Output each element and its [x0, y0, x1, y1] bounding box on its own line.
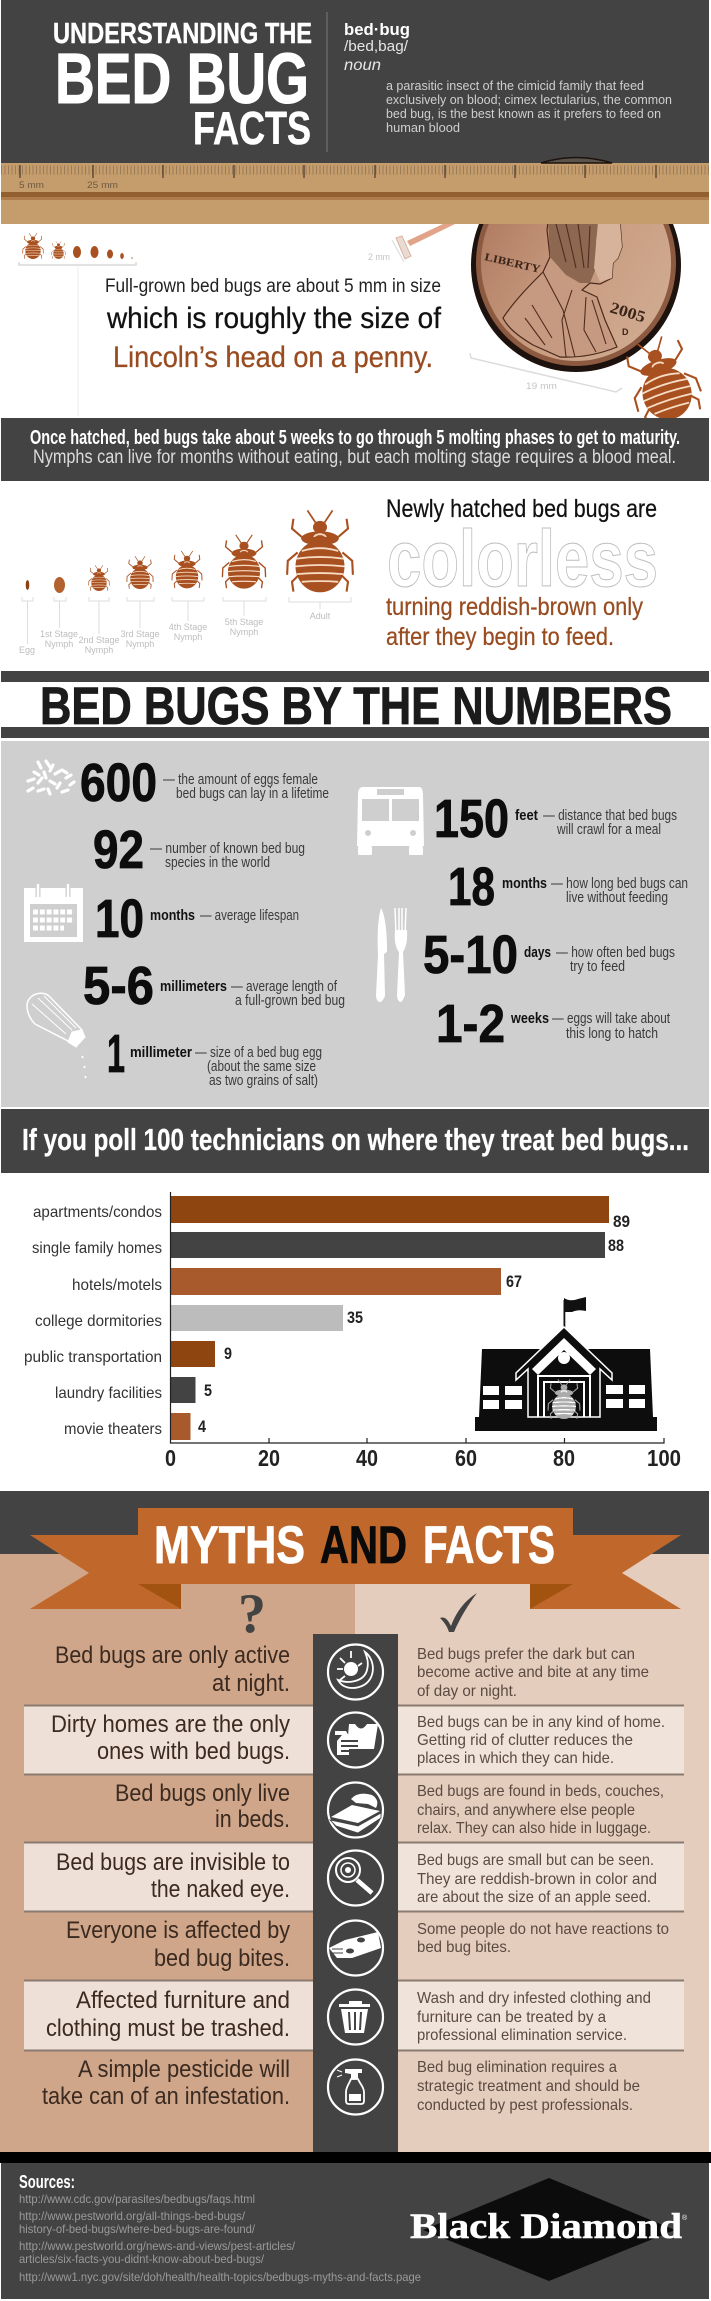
- fact 6: [417, 1990, 651, 2044]
- chart axes: [165, 1192, 681, 1471]
- bar: college dormitories 35: 35: [347, 1308, 363, 1327]
- definition: human blood: [386, 120, 460, 135]
- myth 5: Everyone is affected by: [66, 1917, 290, 1944]
- myth 4: [56, 1849, 290, 1903]
- stat: 1: millimeter: [130, 1044, 192, 1061]
- center column: [313, 1634, 398, 2152]
- myth 3: [115, 1780, 290, 1833]
- fact 5: Some people do not have reactions to: [417, 1921, 669, 1938]
- stat: 5-10: — how often bed bugs: [556, 944, 675, 961]
- icon: fifth stage nymph: 5th Stage: [225, 617, 263, 627]
- fact 3: Bed bugs are found in beds, couches,: [417, 1783, 664, 1800]
- icon: second stage nymph: 2nd Stage: [78, 635, 120, 645]
- icon: fourth stage nymph: Nymph: [174, 632, 202, 642]
- logo: Black Diamond: ®: [682, 2214, 688, 2222]
- LIBERTY: LIBERTY: [483, 251, 542, 276]
- icon: trash can: [328, 1990, 383, 2044]
- definition: bed·bug: [344, 20, 410, 39]
- banner: MYTHS: [154, 1516, 305, 1575]
- title: UNDERSTANDING THE: [53, 18, 312, 50]
- stat: 1: (about the same size: [207, 1058, 316, 1075]
- definition: a parasitic insect of the cimicid family that feed: [386, 78, 644, 93]
- sources: http://www.cdc.gov/parasites/bedbugs/faqs.html: [19, 2192, 255, 2206]
- panel: ruler: 25 mm: [87, 180, 118, 190]
- fact 1: Bed bugs prefer the dark but can: [417, 1646, 635, 1663]
- sources: Sources:: [19, 2172, 75, 2192]
- row bands: [24, 1706, 684, 2051]
- chart axes: 80: [553, 1445, 575, 1471]
- icon: fifth stage nymph: Nymph: [230, 627, 258, 637]
- stat: 150: feet: [515, 807, 538, 824]
- definition: exclusively on blood; cimex lectularius, the common: [386, 92, 672, 107]
- banner: FACTS: [423, 1516, 555, 1575]
- penny arc above ruler: [541, 158, 612, 163]
- icon: fourth stage nymph: [169, 551, 207, 642]
- icon: large bed bug: [618, 330, 706, 428]
- title: [53, 18, 312, 154]
- bar: hotels/motels 67: 67: [506, 1272, 522, 1291]
- fact 6: professional elimination service.: [417, 2027, 627, 2044]
- text block: penny comparison: Full-grown bed bugs are about 5 mm in size: [105, 276, 441, 297]
- chart axes: 40: [356, 1445, 378, 1471]
- icon: egg: [19, 580, 35, 655]
- text block: colorless: [386, 495, 658, 651]
- logo: Black Diamond: [410, 2178, 688, 2281]
- myth 6: [46, 1987, 290, 2042]
- stat: 92: [93, 820, 305, 880]
- icon: knife and fork: [376, 908, 407, 1002]
- sources: history-of-bed-bugs/where-bed-bugs-are-found/: [19, 2222, 256, 2236]
- stat: 150: — distance that bed bugs: [543, 807, 677, 824]
- penny measure: 19 mm: [526, 381, 557, 391]
- fact 3: [417, 1783, 664, 1837]
- bar: laundry facilities 5: [55, 1377, 212, 1403]
- myth 3: Bed bugs only live: [115, 1780, 290, 1807]
- icon: salt shaker: [27, 993, 86, 1078]
- bar: hotels/motels 67: hotels/motels: [72, 1277, 162, 1294]
- fact 7: Bed bug elimination requires a: [417, 2059, 617, 2076]
- stat: 1-2: — eggs will take about: [552, 1010, 671, 1027]
- fact 7: [417, 2059, 640, 2114]
- logo: Black Diamond: Black Diamond: [410, 2206, 682, 2246]
- myth 4: the naked eye.: [151, 1876, 290, 1903]
- bar: hotels/motels 67: [72, 1268, 522, 1295]
- stat: 600: 600: [80, 753, 157, 813]
- stat: 1: as two grains of salt): [209, 1072, 318, 1089]
- definition: [344, 20, 672, 135]
- icon: pin: 2 mm: [368, 252, 390, 262]
- panel: molting band: [1, 418, 709, 481]
- icon: eggs: [28, 761, 74, 794]
- bar: single family homes 88: single family homes: [32, 1240, 162, 1257]
- stat: 600: [80, 753, 329, 813]
- icon: bus: [357, 787, 424, 855]
- fact 6: Wash and dry infested clothing and: [417, 1990, 651, 2007]
- stat: 5-10: days: [524, 944, 551, 961]
- stat: 10: 10: [95, 889, 144, 949]
- icon: second stage nymph: Nymph: [85, 645, 113, 655]
- bar: movie theaters 4: movie theaters: [64, 1421, 162, 1438]
- myth 7: [42, 2056, 290, 2110]
- icon: day and night: [328, 1644, 383, 1700]
- myth 1: at night.: [212, 1670, 290, 1697]
- icon: pin: [368, 224, 455, 262]
- fact 2: [417, 1714, 665, 1767]
- icon: third stage nymph: 3rd Stage: [120, 629, 160, 639]
- sources: articles/six-facts-you-didnt-know-about-bed-bugs/: [19, 2252, 265, 2266]
- title: BED BUG: [55, 40, 309, 119]
- penny measure: [470, 353, 622, 392]
- bar: apartments/condos 89: 89: [613, 1212, 630, 1231]
- definition: /bed,bag/: [344, 38, 409, 55]
- stat: 5-6: 5-6: [83, 956, 154, 1016]
- definition: bed bug, is the best known as it prefers to feed on: [386, 106, 661, 121]
- fact 5: [417, 1921, 669, 1956]
- text block: penny comparison: [105, 276, 442, 374]
- chart: life stages of the bed bug: [19, 510, 353, 655]
- fact 1: [417, 1646, 649, 1700]
- myth 2: [51, 1711, 290, 1765]
- text block: colorless: Newly hatched bed bugs are: [386, 495, 657, 523]
- icon: first stage nymph: Nymph: [45, 639, 73, 649]
- icon: fifth stage nymph: [222, 535, 266, 637]
- fact 4: [417, 1852, 657, 1906]
- bar: public transportation 9: public transportation: [24, 1349, 162, 1366]
- bar: laundry facilities 5: 5: [204, 1381, 212, 1400]
- bar: single family homes 88: [32, 1232, 624, 1258]
- bar chart: where technicians treat bed bugs: [24, 1192, 681, 1471]
- stat: 1-2: 1-2: [436, 994, 505, 1054]
- bar: college dormitories 35: [35, 1305, 363, 1331]
- stat: 92: species in the world: [165, 854, 270, 871]
- stat: 5-6: millimeters: [160, 978, 227, 995]
- stat: 18: [448, 857, 688, 917]
- myth 1: Bed bugs are only active: [55, 1642, 290, 1669]
- panel: numbers: [1, 741, 709, 1107]
- panel: myths and facts: [0, 1491, 709, 2152]
- fact 1: of day or night.: [417, 1683, 517, 1700]
- stat: 10: months: [150, 907, 195, 924]
- panel: header: [1, 0, 709, 163]
- icon: spray bottle: [328, 2060, 383, 2114]
- stat: 150: [434, 789, 677, 849]
- fact 2: Bed bugs can be in any kind of home.: [417, 1714, 665, 1731]
- icon: second stage nymph: [78, 565, 120, 655]
- stat: 5-6: [83, 956, 345, 1016]
- icon: bed: [328, 1782, 383, 1838]
- stat: 10: [95, 889, 299, 949]
- bar: apartments/condos 89: apartments/condos: [33, 1204, 162, 1221]
- bar: public transportation 9: [24, 1341, 232, 1367]
- icon: penny: [471, 158, 681, 372]
- icon: adult: Adult: [310, 611, 331, 621]
- fact 7: conducted by pest professionals.: [417, 2097, 633, 2114]
- myth 1: [55, 1642, 290, 1697]
- bar: public transportation 9: 9: [224, 1344, 232, 1363]
- definition: noun: [344, 57, 381, 74]
- stat: 5-10: 5-10: [423, 925, 518, 985]
- icon: penny: D: [622, 327, 629, 337]
- icon: first stage nymph: [40, 577, 78, 649]
- myth 3: in beds.: [215, 1806, 290, 1833]
- stat: 1-2: this long to hatch: [566, 1025, 658, 1042]
- text block: colorless: turning reddish-brown only: [386, 593, 643, 621]
- year: 2005: [608, 300, 647, 326]
- myth 7: take can of an infestation.: [42, 2083, 290, 2110]
- myth 2: Dirty homes are the only: [51, 1711, 290, 1738]
- myth 6: clothing must be trashed.: [46, 2015, 290, 2042]
- stat: 150: will crawl for a meal: [556, 821, 661, 838]
- chart axes: 60: [455, 1445, 477, 1471]
- stat: 92: 92: [93, 820, 144, 880]
- bar: laundry facilities 5: laundry facilities: [55, 1385, 162, 1402]
- bar: single family homes 88: 88: [608, 1236, 624, 1255]
- chart axes: 100: [647, 1445, 681, 1471]
- myth 4: Bed bugs are invisible to: [56, 1849, 290, 1876]
- panel: ruler: 5 mm: [19, 180, 44, 190]
- stat: 5-10: try to feed: [570, 958, 625, 975]
- banner: [30, 1508, 681, 1609]
- sources: http://www1.nyc.gov/site/doh/health/health-topics/bedbugs-myths-and-facts.page: [19, 2270, 421, 2284]
- bar: college dormitories 35: college dormitories: [35, 1313, 162, 1330]
- fact 1: become active and bite at any time: [417, 1664, 649, 1681]
- icon: third stage nymph: Nymph: [126, 639, 154, 649]
- fact 2: Getting rid of clutter reduces the: [417, 1732, 633, 1749]
- fact 2: places in which they can hide.: [417, 1750, 614, 1767]
- icon: calendar: [24, 884, 83, 942]
- stat: 18: 18: [448, 857, 495, 917]
- icon: question mark: ?: [238, 1583, 266, 1645]
- stat: 600: bed bugs can lay in a lifetime: [176, 785, 329, 802]
- fact 4: They are reddish-brown in color and: [417, 1871, 657, 1888]
- icon: egg: Egg: [19, 645, 35, 655]
- title: FACTS: [193, 102, 311, 154]
- stat: 10: — average lifespan: [200, 907, 299, 924]
- bar: movie theaters 4: [64, 1413, 206, 1440]
- icon: magnifying glass: [328, 1850, 383, 1906]
- stat: 1-2: [436, 994, 671, 1054]
- myth 6: Affected furniture and: [76, 1987, 290, 2014]
- icon: row of small bugs: [19, 233, 136, 416]
- chart axes: 20: [258, 1445, 280, 1471]
- bar: movie theaters 4: 4: [198, 1417, 206, 1436]
- icon: fourth stage nymph: 4th Stage: [169, 622, 207, 632]
- myth 5: bed bug bites.: [154, 1945, 290, 1972]
- icon: check mark: [440, 1593, 477, 1632]
- stat: 1-2: weeks: [510, 1010, 549, 1027]
- stat: 18: months: [502, 875, 547, 892]
- stat: 600: — the amount of eggs female: [163, 771, 318, 788]
- text block: penny comparison: Lincoln’s head on a penny.: [113, 341, 433, 374]
- stat: 1: — size of a bed bug egg: [195, 1044, 322, 1061]
- myth 5: [66, 1917, 290, 1972]
- fact 3: chairs, and anywhere else people: [417, 1802, 635, 1819]
- text block: penny comparison: which is roughly the size of: [106, 302, 442, 335]
- panel: ruler: [1, 163, 709, 224]
- stat: 5-10: [423, 925, 675, 985]
- fact 4: Bed bugs are small but can be seen.: [417, 1852, 654, 1869]
- stat: 5-6: a full-grown bed bug: [235, 992, 345, 1009]
- bar: apartments/condos 89: [33, 1196, 630, 1231]
- stat: 150: 150: [434, 789, 509, 849]
- myth 2: ones with bed bugs.: [97, 1738, 290, 1765]
- stat: 5-6: — average length of: [231, 978, 338, 995]
- heading: poll of technicians: [1, 1109, 709, 1173]
- banner: AND: [320, 1516, 407, 1575]
- chart axes: 0: [165, 1445, 176, 1471]
- stat: 18: live without feeding: [566, 889, 668, 906]
- icon: arm with bites: [328, 1920, 383, 1976]
- myth 7: A simple pesticide will: [78, 2056, 290, 2083]
- text block: colorless: after they begin to feed.: [386, 623, 614, 651]
- icon: third stage nymph: [120, 556, 160, 649]
- icon: school building with bed bug: [475, 1297, 657, 1431]
- fact 3: relax. They can also hide in luggage.: [417, 1820, 651, 1837]
- sources: http://www.pestworld.org/all-things-bed-bugs/: [19, 2209, 246, 2223]
- sources: [19, 2172, 421, 2284]
- fact 4: are about the size of an apple seed.: [417, 1889, 651, 1906]
- fact 6: furniture can be treated by a: [417, 2009, 606, 2026]
- sources: http://www.pestworld.org/news-and-views/pest-articles/: [19, 2239, 296, 2253]
- icon: adult: [287, 510, 353, 621]
- fact 7: strategic treatment and should be: [417, 2078, 640, 2095]
- icon: first stage nymph: 1st Stage: [40, 629, 78, 639]
- icon: cleaning supplies: [328, 1712, 383, 1768]
- stat: 92: — number of known bed bug: [150, 840, 305, 857]
- fact 5: bed bug bites.: [417, 1939, 511, 1956]
- panel: footer: [0, 2152, 711, 2299]
- stat: 1: [107, 1024, 322, 1089]
- stat: 1: 1: [107, 1024, 125, 1084]
